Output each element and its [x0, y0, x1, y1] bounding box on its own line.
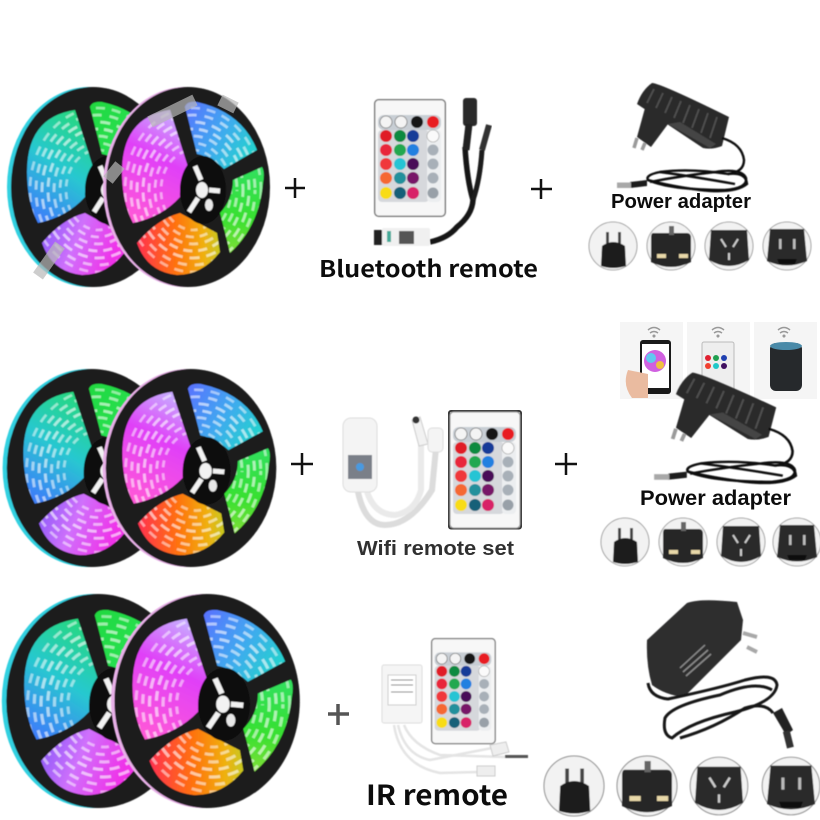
plug options	[589, 222, 811, 270]
icon: LED reel front	[103, 87, 270, 287]
heading: Power adapter: Power adapter	[611, 191, 751, 213]
icon: remote control	[432, 639, 495, 744]
icon: remote control	[375, 100, 445, 216]
panel: bluetooth set row	[7, 83, 811, 287]
icon: LED reel back	[3, 369, 177, 567]
wifi controller	[343, 416, 443, 525]
icon: LED reel back	[2, 594, 190, 808]
panel: smart speaker	[754, 322, 817, 399]
heading: IR remote: IR remote	[366, 774, 508, 814]
heading: Bluetooth remote: Bluetooth remote	[319, 250, 538, 284]
plug options	[601, 518, 820, 566]
bluetooth controller	[374, 228, 430, 246]
panel: IR set row	[2, 594, 820, 816]
icon: power adapter AU	[647, 600, 794, 748]
heading: Wifi remote set: Wifi remote set	[357, 538, 514, 560]
icon: remote control	[449, 411, 521, 528]
panel: remote control mode	[687, 322, 750, 399]
plus sign	[285, 178, 305, 198]
icon: power adapter	[654, 373, 796, 483]
watermark strokes	[38, 100, 236, 276]
panel: wifi set row	[3, 322, 820, 567]
icon: power adapter	[617, 83, 747, 191]
plus sign	[328, 704, 349, 725]
IR controller	[382, 665, 528, 776]
heading: Power adapter: Power adapter	[640, 486, 792, 510]
icon: LED reel front	[103, 369, 276, 567]
plus sign	[531, 179, 552, 199]
plug options	[544, 756, 820, 816]
plus sign	[555, 453, 577, 475]
bluetooth cable	[430, 98, 489, 242]
icon: LED reel back	[7, 87, 175, 287]
plus sign	[291, 453, 313, 475]
icon: LED reel front	[111, 594, 300, 808]
panel: phone app control	[620, 322, 683, 399]
